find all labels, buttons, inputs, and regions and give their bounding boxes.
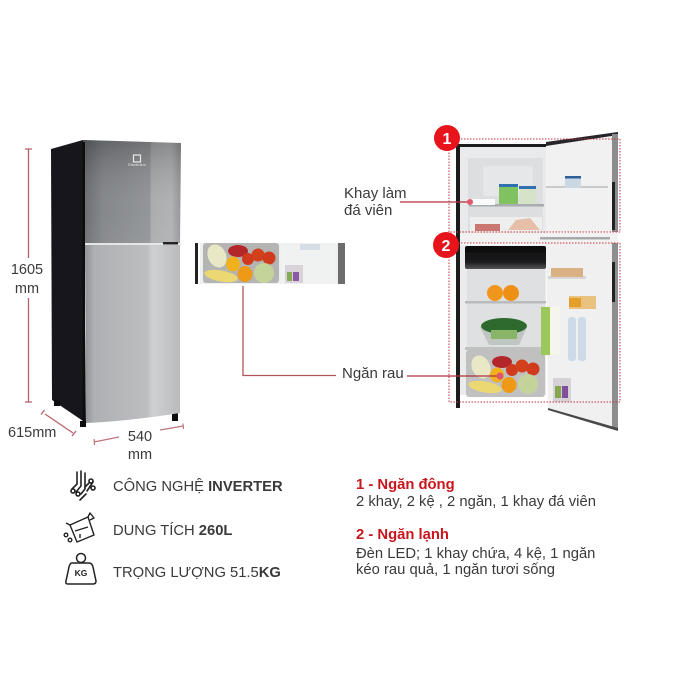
feature: capacity: DUNG TÍCH 260L (113, 522, 232, 539)
icon: weight (66, 554, 96, 584)
height dimension (25, 149, 32, 402)
crisper crop photo (195, 241, 345, 284)
freezer door (546, 132, 618, 232)
icon: inverter circuit (71, 471, 95, 500)
callout label: ice tray: Khay làm (344, 185, 407, 202)
cabinet left edge and top frame (456, 144, 546, 408)
dotted box 2: fridge (449, 243, 620, 402)
text block: fridge: 2 - Ngăn lạnh (356, 527, 449, 543)
fridge exterior (51, 140, 181, 427)
width label: mm (128, 447, 152, 463)
open fridge photo (456, 132, 618, 431)
callout label: ice tray: đá viên (344, 202, 392, 219)
fridge door (541, 243, 618, 431)
badge 1: 1 (443, 131, 452, 148)
divider between compartments (458, 233, 618, 243)
callout label: Ngăn rau: Ngăn rau (342, 365, 404, 382)
freezer compartment (458, 146, 546, 234)
lower door (85, 244, 180, 423)
side panel (51, 140, 86, 423)
door divider (82, 142, 181, 422)
callout line: crisper right (407, 372, 504, 380)
badge 1 (434, 125, 460, 151)
height label: 1605 (11, 262, 43, 278)
width dimension (94, 424, 184, 445)
depth dimension (41, 410, 76, 436)
width label: 540 (128, 429, 152, 445)
icon: capacity container (64, 513, 94, 542)
text block: freezer: 1 - Ngăn đông (356, 477, 455, 493)
text block: freezer (356, 477, 596, 510)
feature: inverter: CÔNG NGHỆ INVERTER (113, 478, 283, 495)
feature: weight: TRỌNG LƯỢNG 51.5KG (113, 565, 281, 581)
callout line: ice tray (400, 199, 473, 205)
logo (128, 155, 146, 167)
text block: fridge: Đèn LED; 1 khay chứa, 4 kệ, 1 ngăn (356, 546, 595, 562)
fridge compartment (458, 245, 546, 397)
width label (128, 429, 152, 463)
logo: Electrolux (128, 162, 146, 167)
height label (11, 262, 43, 297)
depth label: 615mm (8, 425, 56, 441)
icon: weight: KG (75, 568, 88, 578)
height label: mm (15, 281, 39, 297)
callout line: crisper (243, 286, 336, 376)
upper door (83, 140, 181, 244)
badge 2 (433, 232, 459, 258)
dotted box 1: freezer (449, 139, 620, 232)
text block: fridge: kéo rau quả, 1 ngăn tươi sống (356, 562, 555, 578)
text block: freezer: 2 khay, 2 kệ , 2 ngăn, 1 khay đá viên (356, 494, 596, 510)
text block: fridge (356, 527, 595, 578)
callout label: ice tray (344, 185, 407, 219)
feet (54, 400, 178, 427)
badge 2: 2 (442, 238, 451, 255)
